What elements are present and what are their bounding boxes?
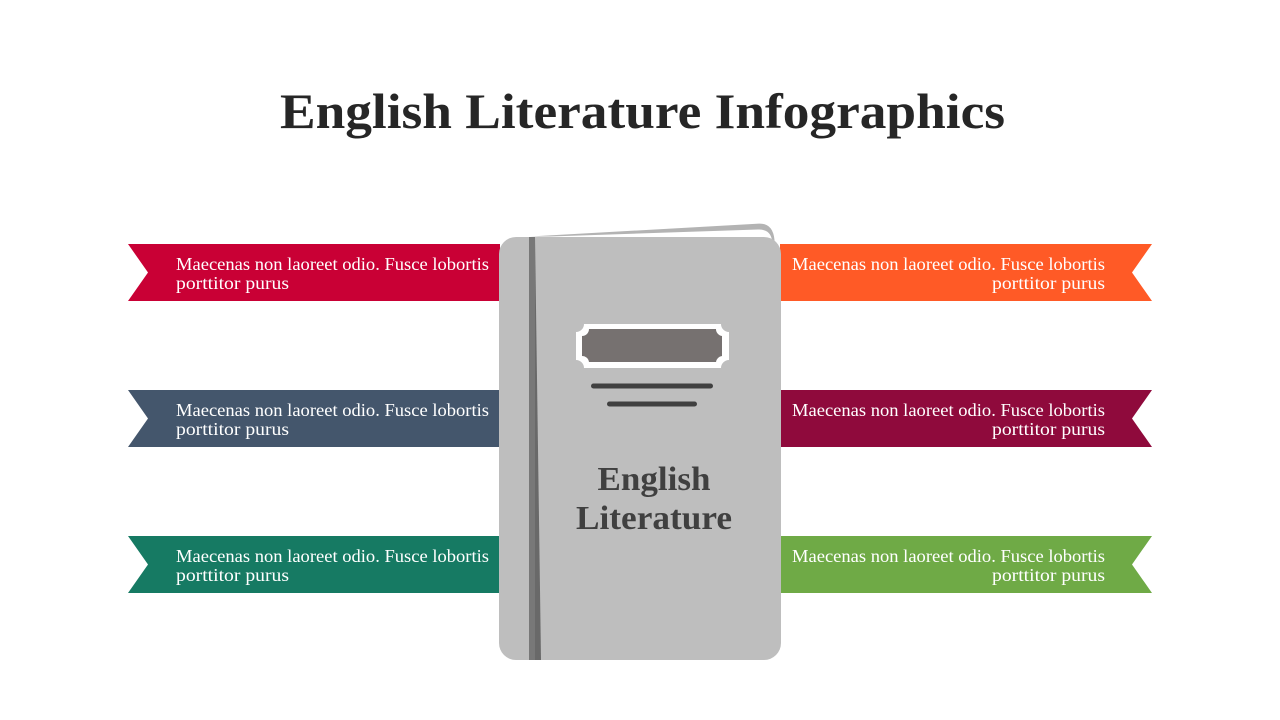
ribbon: maroon, middle right xyxy=(780,390,1152,447)
ribbon: green, bottom right: Maecenas non laoreet odio. Fusce lobortis xyxy=(792,546,1105,566)
ribbon: red, top left: Maecenas non laoreet odio. Fusce lobortis xyxy=(176,254,489,274)
ribbon: red, top left xyxy=(128,244,500,301)
ribbon: green, bottom right: porttitor purus xyxy=(992,565,1105,585)
ribbon: teal, bottom left: porttitor purus xyxy=(176,565,289,585)
ribbon: red, top left: porttitor purus xyxy=(176,273,289,293)
front cover xyxy=(499,237,781,660)
ribbon: maroon, middle right: porttitor purus xyxy=(992,419,1105,439)
ribbon: slate, middle left xyxy=(128,390,500,447)
book title: Literature xyxy=(576,500,732,537)
label plaque xyxy=(576,324,729,368)
ribbon: slate, middle left: Maecenas non laoreet odio. Fusce lobortis xyxy=(176,400,489,420)
book title xyxy=(576,461,732,537)
ribbon: slate, middle left: porttitor purus xyxy=(176,419,289,439)
spine band xyxy=(529,237,541,660)
title: English Literature Infographics xyxy=(280,83,1005,139)
white page xyxy=(535,229,772,245)
book illustration xyxy=(499,224,781,660)
ribbon: teal, bottom left: Maecenas non laoreet odio. Fusce lobortis xyxy=(176,546,489,566)
ribbon: maroon, middle right: Maecenas non laoreet odio. Fusce lobortis xyxy=(792,400,1105,420)
ribbon: orange, top right xyxy=(780,244,1152,301)
ribbon: orange, top right: porttitor purus xyxy=(992,273,1105,293)
book title: English xyxy=(598,461,711,498)
ribbon: orange, top right: Maecenas non laoreet odio. Fusce lobortis xyxy=(792,254,1105,274)
back cover xyxy=(530,224,774,245)
title lines on cover xyxy=(591,384,713,406)
ribbon: teal, bottom left xyxy=(128,536,500,593)
ribbon: green, bottom right xyxy=(780,536,1152,593)
